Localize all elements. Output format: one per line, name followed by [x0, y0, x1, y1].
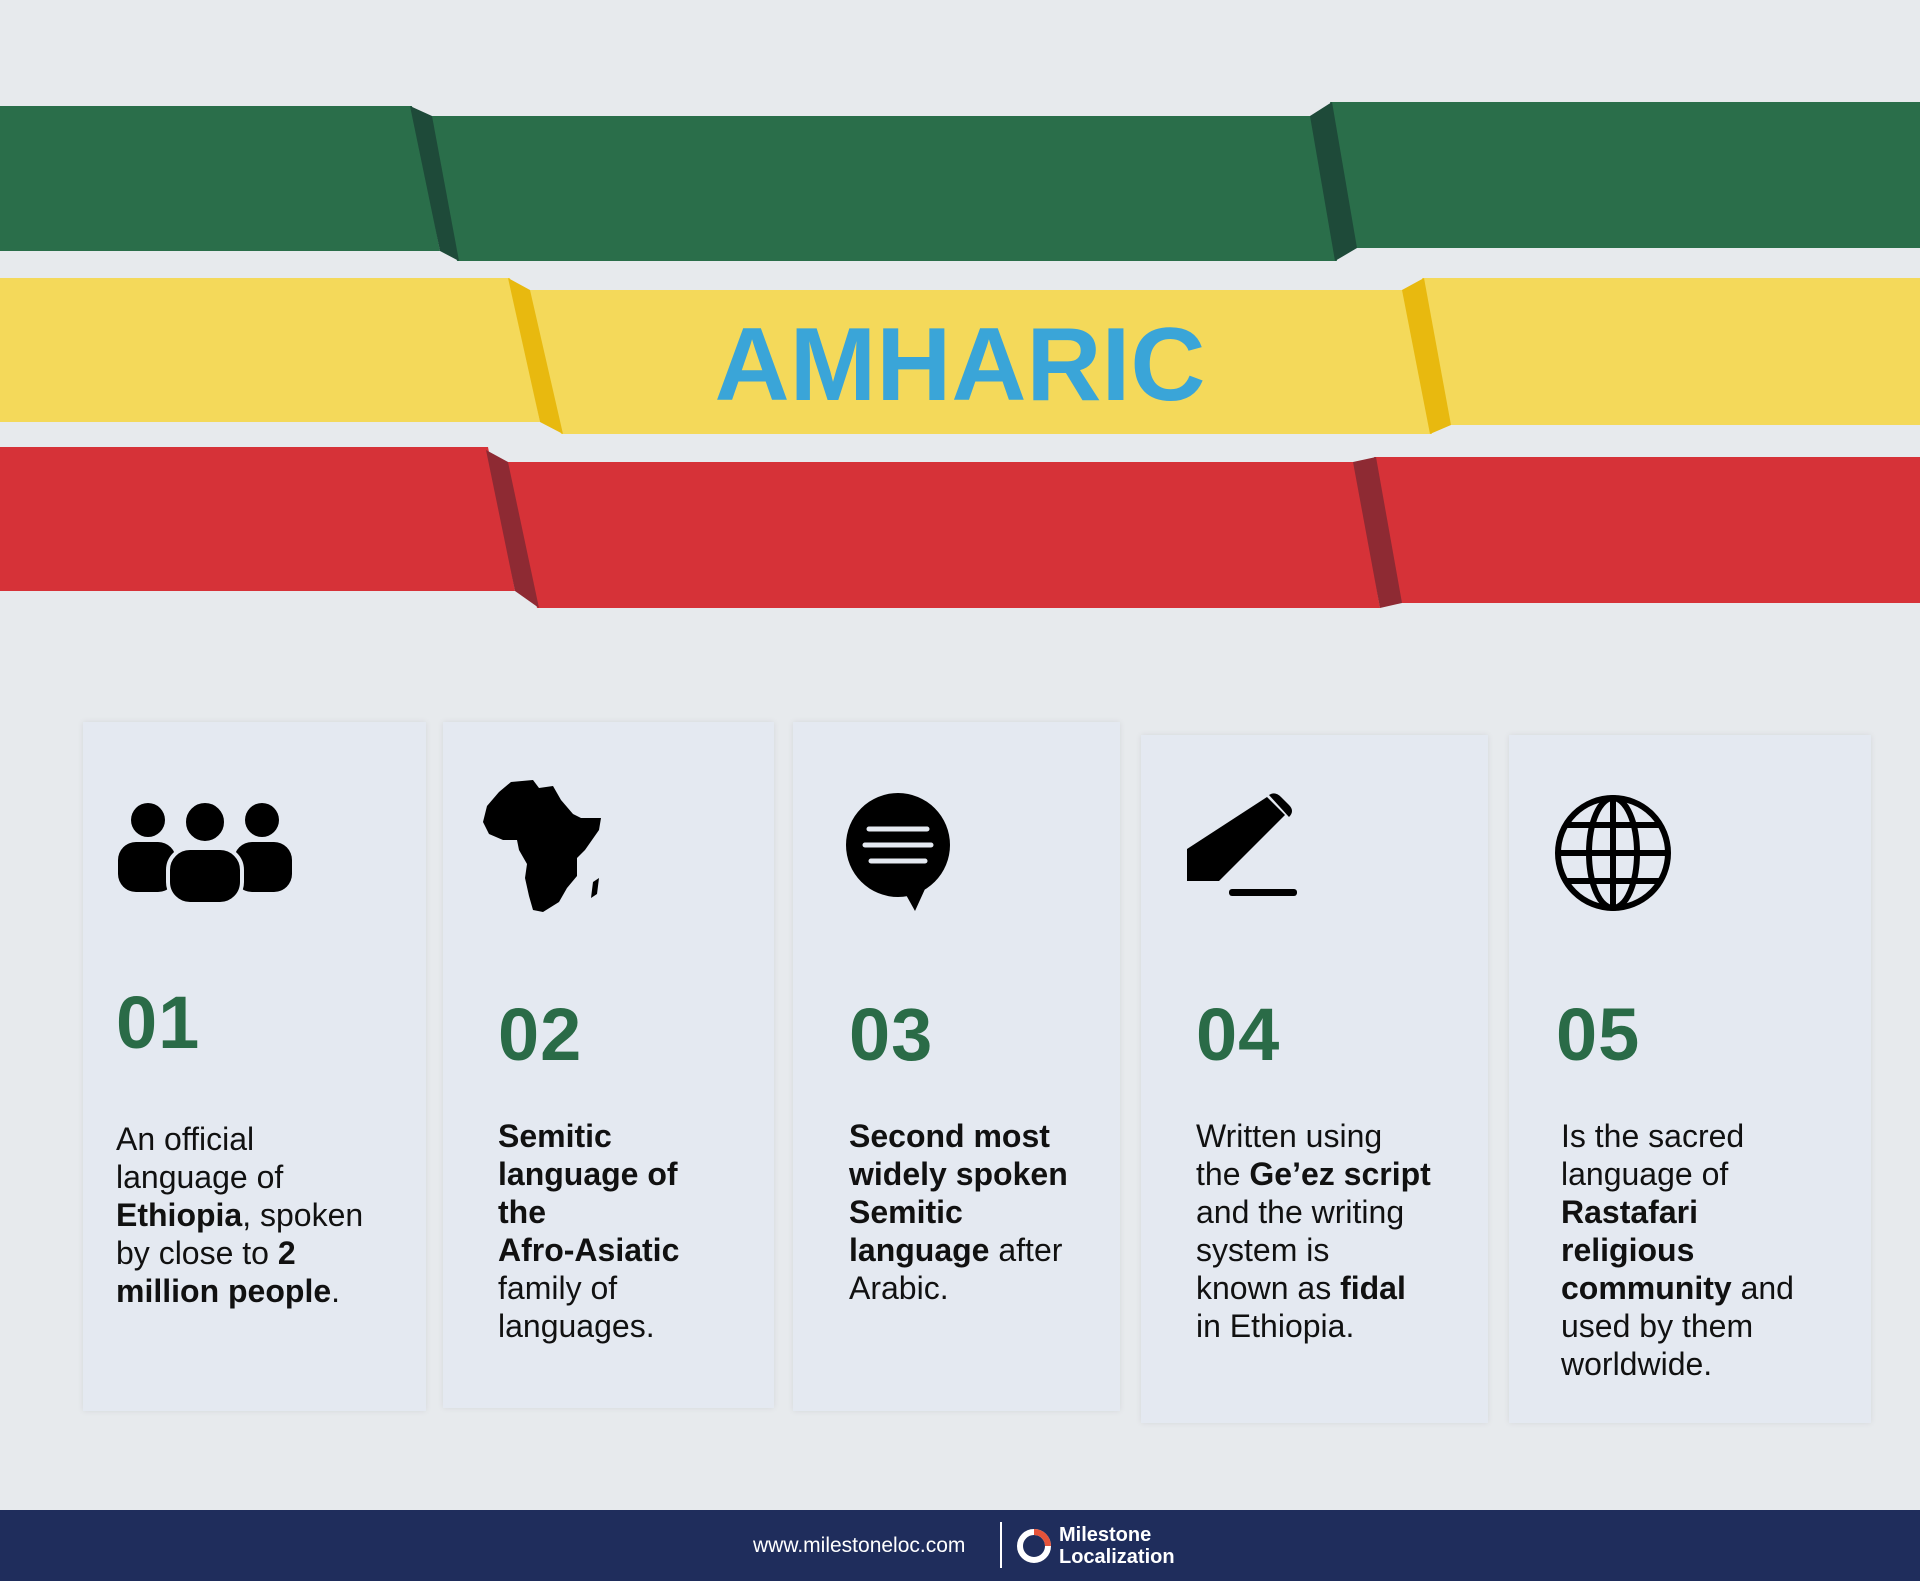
icon: pencil [1187, 793, 1297, 896]
panel: card 2 [443, 722, 774, 1408]
text 1: million people. [116, 1273, 340, 1309]
icon: globe [1555, 795, 1671, 911]
text 3: Arabic. [849, 1270, 949, 1306]
text 3: Second most [849, 1118, 1050, 1154]
footer [0, 1510, 1920, 1581]
text 2 [498, 1118, 679, 1344]
text 2: language of [498, 1156, 678, 1192]
icon: speech bubble [846, 793, 950, 911]
text 2: Semitic [498, 1118, 612, 1154]
text 4: and the writing [1196, 1194, 1404, 1230]
text 5: Is the sacred [1561, 1118, 1744, 1154]
panel: card 3 [793, 722, 1120, 1411]
text 3: language after [849, 1232, 1062, 1268]
logo: Localization [1059, 1546, 1175, 1568]
text 2: languages. [498, 1308, 655, 1344]
number 05: 05 [1556, 993, 1640, 1076]
text 3 [848, 1118, 1068, 1306]
panel: card 4 [1141, 735, 1488, 1423]
text 4 [1196, 1118, 1431, 1344]
text 4: in Ethiopia. [1196, 1308, 1354, 1344]
number 01: 01 [116, 981, 200, 1064]
text 2: Afro-Asiatic [498, 1232, 679, 1268]
text 5: language of [1561, 1156, 1728, 1192]
panel: card 5 [1509, 735, 1871, 1423]
text 1: language of [116, 1159, 283, 1195]
text 3: widely spoken [849, 1156, 1068, 1192]
text 2: family of [498, 1270, 617, 1306]
text 5: worldwide. [1561, 1346, 1712, 1382]
band: red [0, 447, 1920, 608]
text 1 [116, 1121, 363, 1309]
flag bands [0, 102, 1920, 608]
text 5: Rastafari [1561, 1194, 1698, 1230]
footer url: www.milestoneloc.com [753, 1534, 965, 1557]
text 4: Written using [1196, 1118, 1382, 1154]
text 3: Semitic [849, 1194, 963, 1230]
text 5: religious [1561, 1232, 1694, 1268]
text 5 [1561, 1118, 1794, 1382]
logo: Milestone [1059, 1524, 1151, 1546]
icon: africa [483, 780, 601, 912]
logo [1017, 1524, 1175, 1568]
text 2: the [498, 1194, 546, 1230]
text 1: by close to 2 [116, 1235, 296, 1271]
text 4: system is [1196, 1232, 1329, 1268]
number 02: 02 [498, 993, 582, 1076]
text 1: Ethiopia, spoken [116, 1197, 363, 1233]
number 04: 04 [1196, 993, 1280, 1076]
panel: card 1 [83, 722, 426, 1411]
icon: people [118, 803, 292, 902]
text 4: the Ge’ez script [1196, 1156, 1431, 1192]
text 5: community and [1561, 1270, 1794, 1306]
band: yellow [0, 278, 1920, 434]
text 5: used by them [1561, 1308, 1753, 1344]
band: green [0, 102, 1920, 261]
text 1: An official [116, 1121, 254, 1157]
text 4: known as fidal [1196, 1270, 1406, 1306]
number 03: 03 [849, 993, 933, 1076]
title: AMHARIC [714, 307, 1206, 423]
